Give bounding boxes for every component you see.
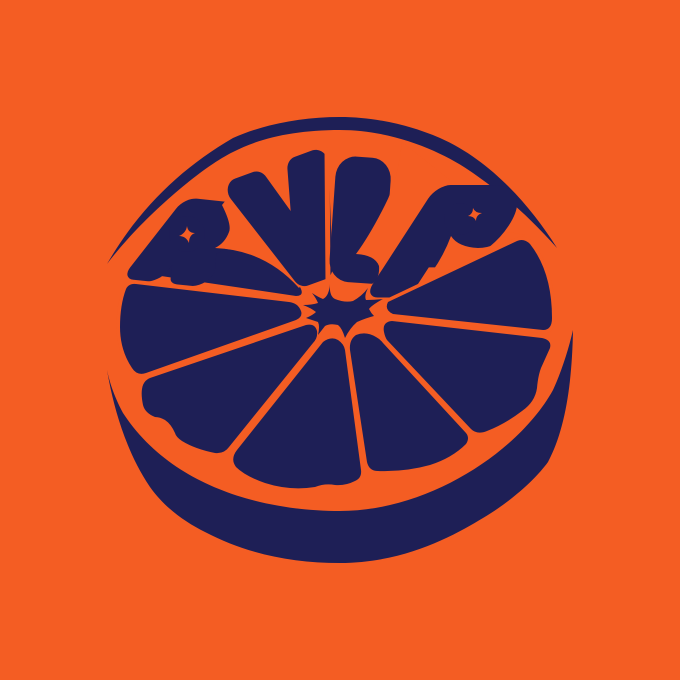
letter R: R xyxy=(121,192,262,294)
icon: sparkle on R xyxy=(179,226,195,243)
bottom rind crescent xyxy=(107,330,573,563)
segment: bottom xyxy=(233,338,361,488)
segment: upper left, under the R xyxy=(134,235,302,296)
letter P: P xyxy=(360,173,534,311)
segment: left xyxy=(120,284,301,374)
segment: lower left xyxy=(142,325,317,453)
counter fill: R xyxy=(169,216,205,252)
segment: lower right xyxy=(350,333,468,471)
letter L: L xyxy=(340,153,417,291)
orange core splash xyxy=(303,284,383,338)
top rind crescent xyxy=(107,117,557,264)
letter V: V xyxy=(228,134,362,313)
segment: right xyxy=(384,321,550,433)
segment: upper right xyxy=(387,240,552,330)
counter fill: P xyxy=(444,203,476,235)
icon: sparkle on P xyxy=(468,208,482,221)
